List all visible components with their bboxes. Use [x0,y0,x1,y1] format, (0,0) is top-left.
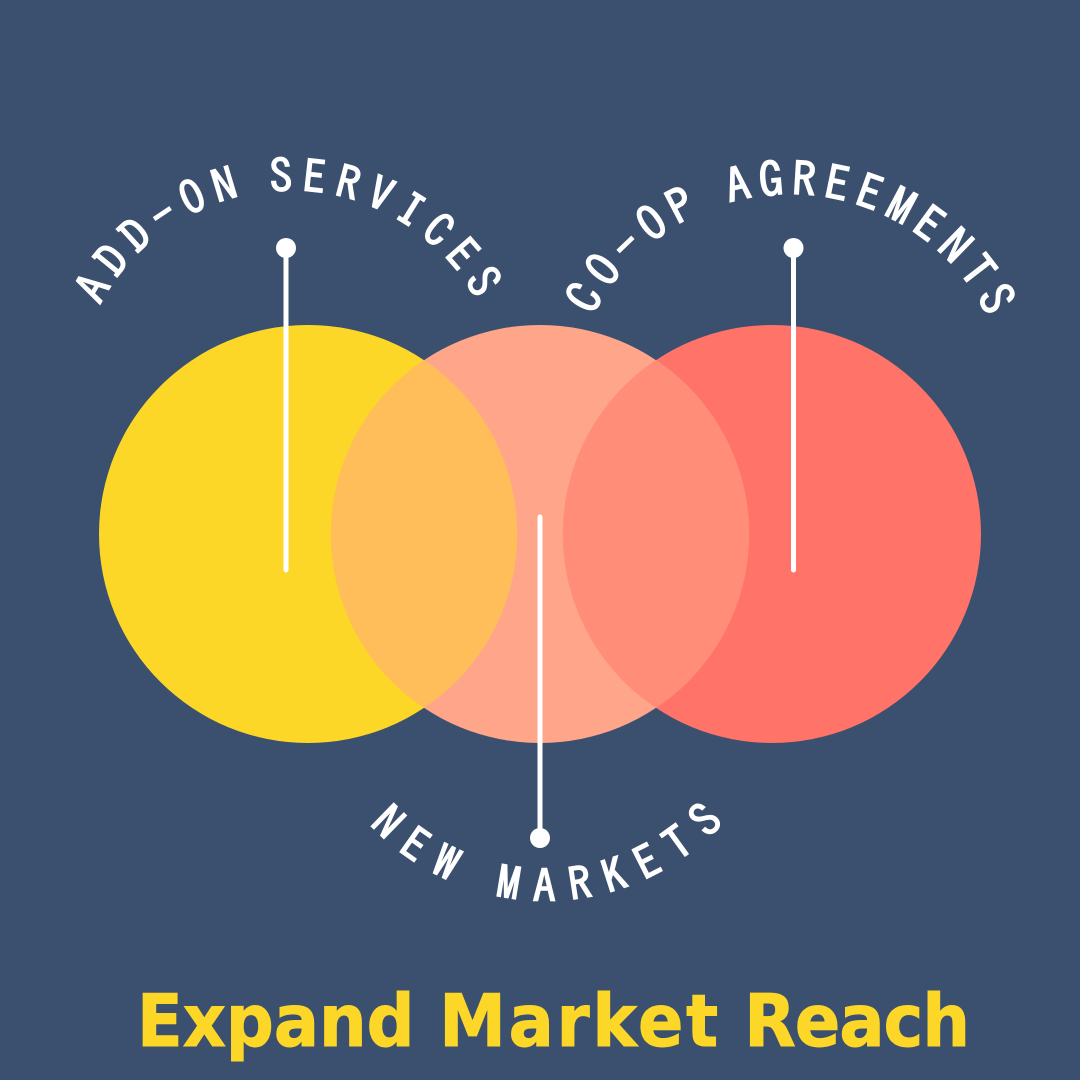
label: co-op agreements: CO-OP AGREEMENTS [566,160,1015,313]
pointer: add-on services [276,238,296,570]
overlap: new markets and co-op agreements [563,360,749,708]
title: Expand [137,980,415,1064]
pointer: co-op agreements [784,238,804,570]
label: new markets: NEW MARKETS [370,802,720,902]
circle: new markets [331,325,749,743]
circle: add-on services [99,325,517,743]
circle: co-op agreements [563,325,981,743]
title: Market [439,980,721,1064]
label: add-on services: ADD-ON SERVICES [76,156,501,306]
pointer: new markets [530,517,550,848]
title: Reach [744,980,969,1064]
venn diagram [99,325,981,743]
overlap: add-on services and new markets [331,360,517,708]
